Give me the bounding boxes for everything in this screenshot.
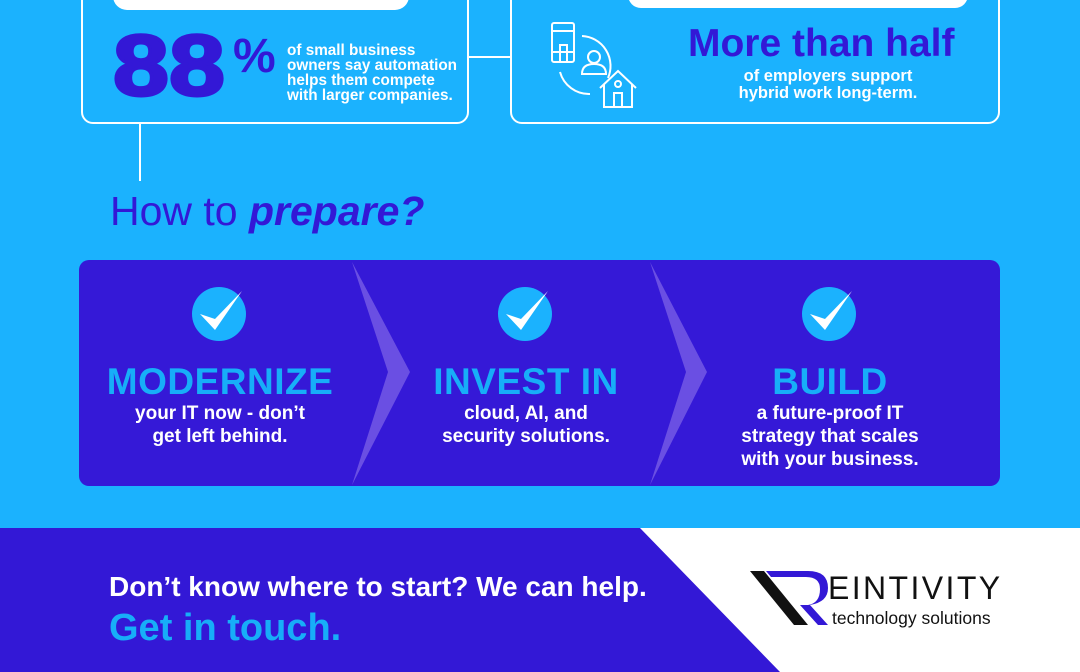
cta text: Don’t know where to start? We can help. (109, 571, 647, 602)
white triangle background (640, 528, 1080, 672)
big number 88% (113, 18, 276, 114)
heading: more than half: More than half (688, 22, 955, 65)
step: build: strategy that scales (741, 426, 919, 447)
stat text: of employers support (744, 67, 912, 85)
stat text: hybrid work long-term. (739, 84, 917, 102)
big number 88%: 88 (113, 18, 225, 114)
logo (750, 570, 1003, 628)
step: build (741, 287, 919, 470)
cta link: Get in touch. (109, 607, 341, 649)
step: build: a future-proof IT (757, 403, 903, 424)
step: modernize: get left behind. (152, 426, 288, 447)
icon: check (192, 287, 246, 341)
icon: hybrid work (551, 22, 637, 108)
logo: EINTIVITY (828, 570, 1003, 606)
stat text (287, 42, 457, 104)
step: modernize: your IT now - don’t (135, 403, 305, 424)
white pill (628, 0, 968, 8)
icon: check (498, 287, 552, 341)
stat text: with larger companies. (287, 87, 453, 104)
step: invest in (433, 287, 619, 447)
step: build: BUILD (772, 361, 888, 402)
connector line (469, 56, 510, 58)
step: build: with your business. (741, 449, 919, 470)
step: invest in: INVEST IN (433, 361, 619, 402)
vertical connector (139, 124, 141, 181)
big number 88%: % (233, 30, 276, 83)
step: modernize: MODERNIZE (107, 361, 333, 402)
stat text: of small business (287, 42, 415, 59)
stat text (739, 67, 917, 102)
icon: check (802, 287, 856, 341)
chevrons (352, 262, 707, 484)
step: modernize (107, 287, 333, 447)
title: How to prepare? (110, 188, 424, 234)
panel: hybrid work stat (510, 0, 1000, 124)
footer (0, 528, 1080, 672)
step: invest in: cloud, AI, and (464, 403, 588, 424)
stat text: helps them compete (287, 72, 435, 89)
stat text: owners say automation (287, 57, 457, 74)
logo: technology solutions (832, 608, 991, 628)
panel: steps (79, 260, 1000, 486)
panel: automation stat (81, 0, 469, 124)
white pill (113, 0, 409, 10)
step: invest in: security solutions. (442, 426, 610, 447)
